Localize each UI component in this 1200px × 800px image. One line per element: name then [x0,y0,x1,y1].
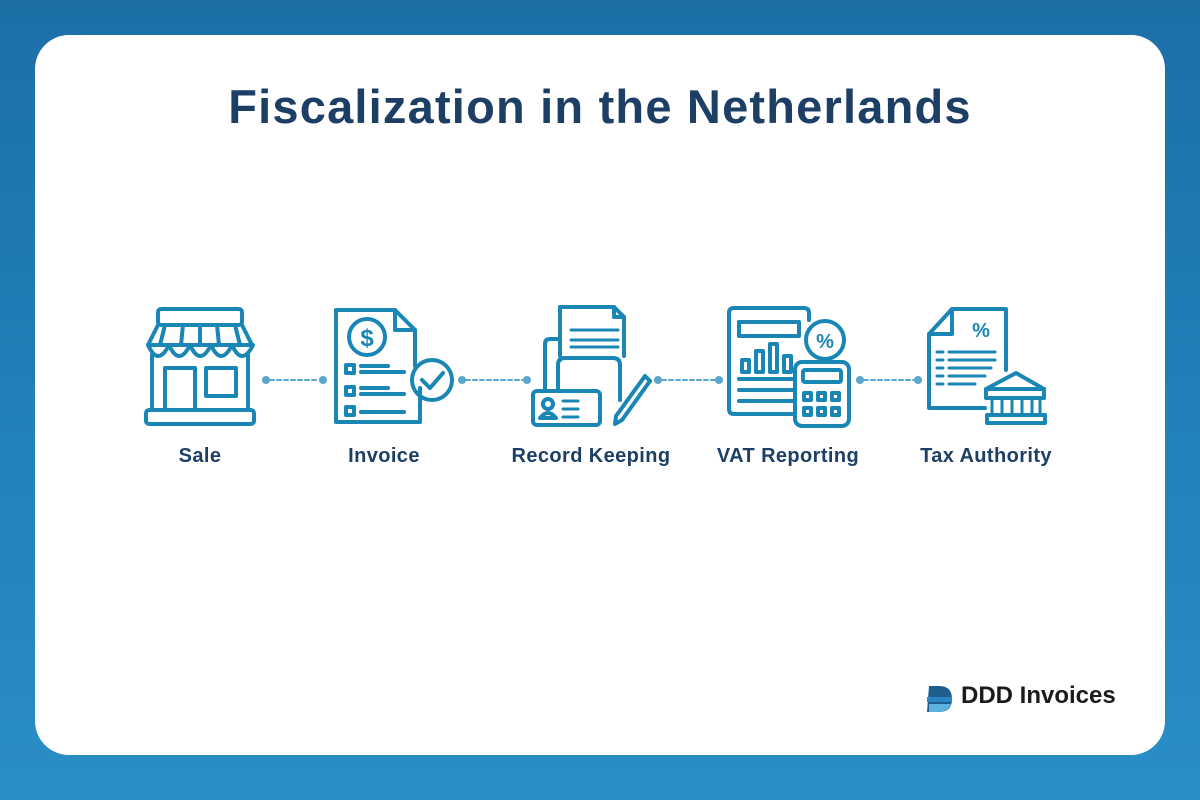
icon: tax authority: % [972,320,990,342]
title: Fiscalization in the Netherlands [228,80,972,133]
icon: invoice [336,310,452,422]
icon: invoice: $ [360,325,374,352]
label: VAT Reporting: VAT Reporting [717,445,859,467]
logo: DDD Invoices: DDD Invoices [961,682,1116,709]
icon: VAT reporting: % [816,331,834,353]
connector 4 [856,376,922,384]
icon: shop [146,309,254,424]
icon: record keeping [533,307,650,425]
label: Record Keeping: Record Keeping [512,445,670,467]
connector 3 [654,376,723,384]
connector 2 [458,376,531,384]
icon: VAT reporting [729,308,849,426]
connector 1 [262,376,327,384]
label: Invoice: Invoice [348,445,420,467]
label: Sale: Sale [179,445,221,467]
label: Tax Authority: Tax Authority [920,445,1052,467]
icon: tax authority [929,309,1045,423]
